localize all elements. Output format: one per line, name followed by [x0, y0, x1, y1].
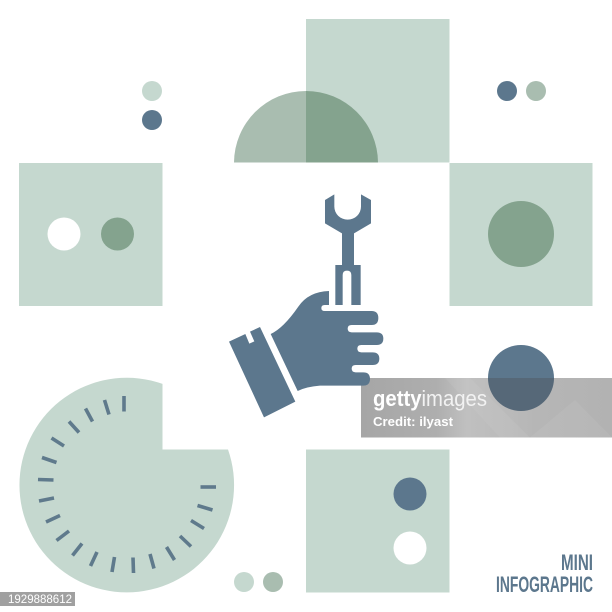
watermark: image number: 1929888612 [8, 592, 72, 606]
hand [271, 291, 383, 391]
panel: left square with two dots [19, 163, 162, 306]
title: mini infographic [496, 550, 593, 597]
dial: notched circle with tick marks [19, 378, 234, 592]
wrench [325, 194, 371, 305]
watermark band: Credit: ilyast [373, 415, 454, 429]
icon: hand holding wrench [229, 194, 383, 417]
watermark band [361, 378, 612, 438]
decorative dots: top right pair [497, 81, 546, 101]
cuff [229, 327, 295, 417]
watermark band: gettyimages [373, 386, 487, 411]
large navy circle [488, 345, 554, 411]
decorative dots: top left pair [142, 81, 162, 130]
panel: right square with green circle [450, 163, 592, 306]
title: mini infographic: MINI [561, 550, 593, 575]
panel: bottom square with two dots [306, 450, 450, 592]
panel: top square with half circle [234, 19, 450, 162]
decorative dots: bottom pair [234, 572, 283, 592]
